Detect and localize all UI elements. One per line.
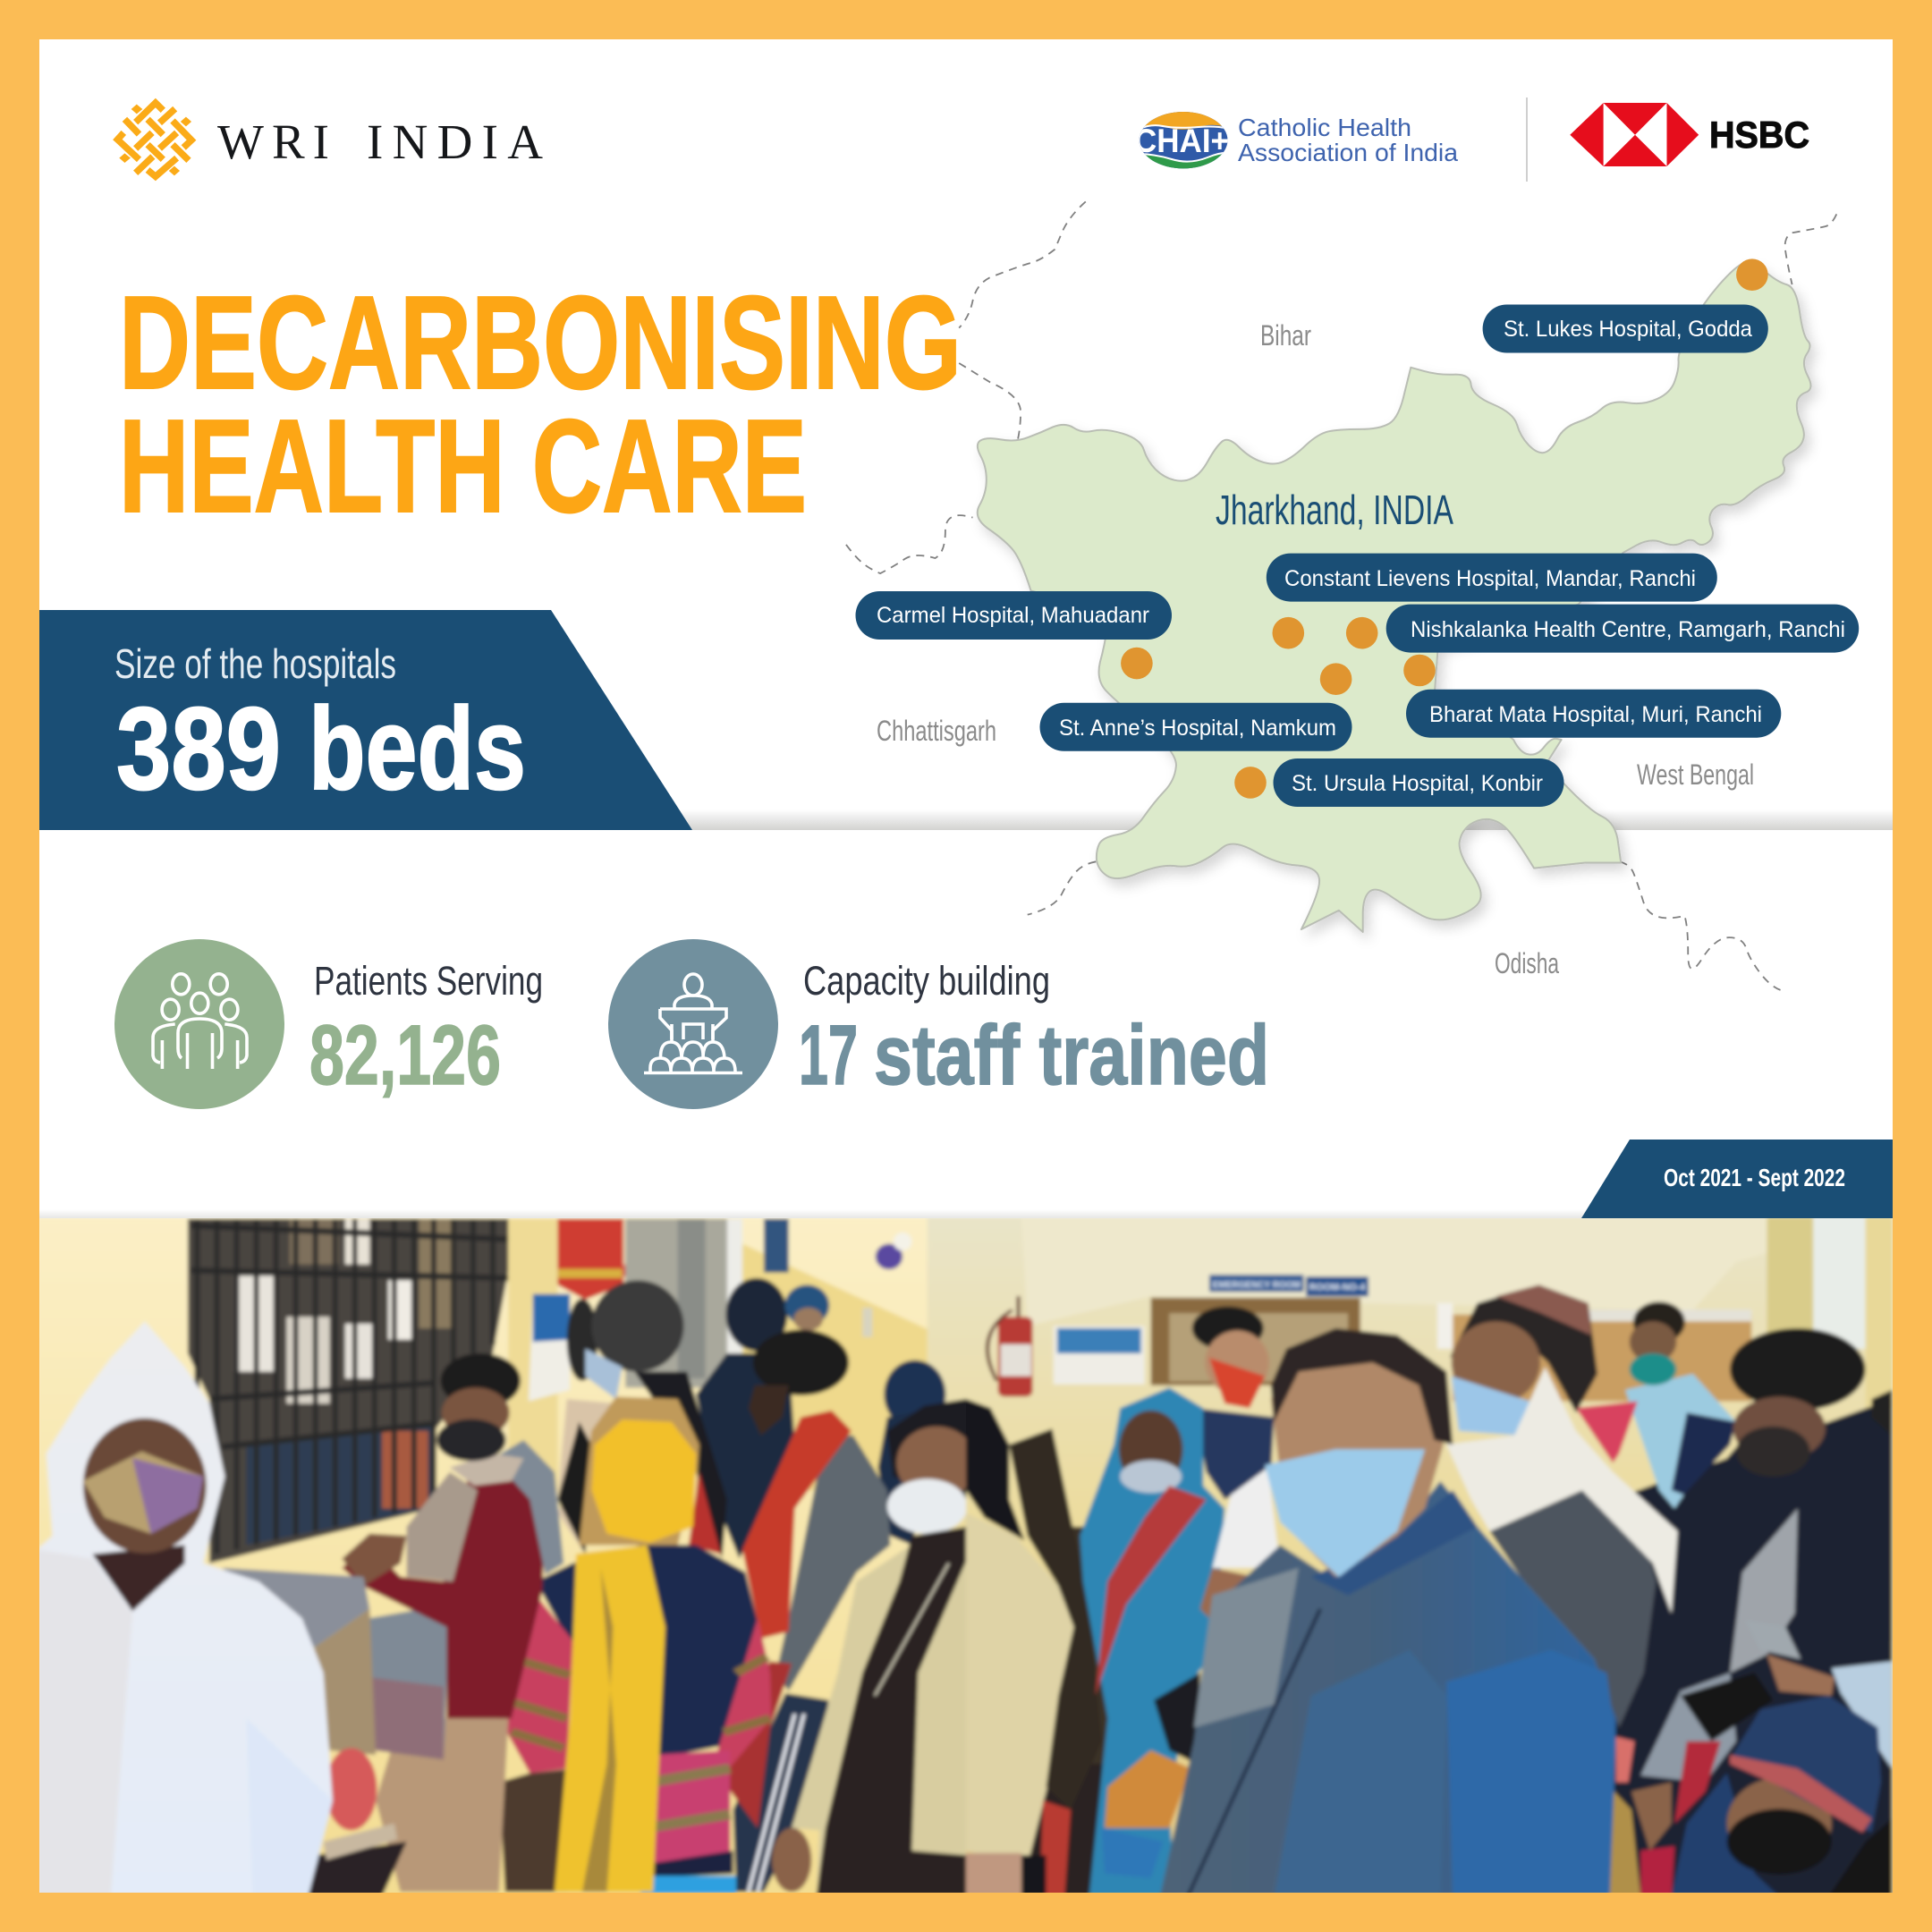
pill: Carmel Hospital [855, 591, 1172, 640]
blue sari woman [1080, 1387, 1224, 1896]
banner: size of the hospitals: beds [309, 682, 526, 814]
logo divider [1526, 97, 1528, 182]
stat: patients serving [114, 939, 543, 1109]
logo wordmark INDIA: INDIA [367, 114, 543, 169]
logo: WRI India [117, 103, 543, 176]
map shape [978, 262, 1810, 932]
title: HEALTH CARE [119, 393, 807, 540]
logo: CHAI [1140, 112, 1458, 168]
pill: Bharat Mata Hospital: Bharat Mata Hospital, Muri, Ranchi [1429, 702, 1762, 727]
pill: Nishkalanka Health Centre: Nishkalanka Health Centre, Ramgarh, Ranchi [1411, 617, 1845, 642]
marker dots [1121, 258, 1768, 799]
pill: St. Lukes Hospital [1483, 304, 1768, 352]
label: Odisha: Odisha [1495, 947, 1559, 979]
wall shading [742, 1244, 930, 1490]
notice sign [529, 1294, 570, 1402]
fire pipe [557, 1219, 623, 1300]
room signs [1209, 1275, 1368, 1296]
label: Capacity building [803, 958, 1050, 1004]
green mask man [1625, 1374, 1736, 1509]
bottom right person in beanie [1672, 1773, 1779, 1896]
maroon sweater woman [376, 1718, 508, 1892]
back nun [884, 1360, 945, 1428]
granite counter [222, 1568, 369, 1648]
date tag: Oct 2021 - Sept 2022 [1664, 1164, 1845, 1191]
room signs: ROOM-NO-4 [1309, 1282, 1366, 1292]
right man with scarf [1638, 1417, 1892, 1718]
pill: Constant Lievens Hospital: Constant Lievens Hospital, Mandar, Ranchi [1284, 566, 1696, 591]
logo text line 2: Association of India [1238, 139, 1458, 166]
label: West Bengal: West Bengal [1637, 758, 1754, 791]
pill: St. Ursula Hospital: St. Ursula Hospital, Konbir [1292, 771, 1543, 796]
wall pillar [508, 1219, 557, 1493]
title: DECARBONISING [119, 269, 962, 417]
notice sign [1054, 1326, 1145, 1385]
logo text line 1: Catholic Health [1238, 114, 1411, 141]
pill: St. Lukes Hospital: St. Lukes Hospital, Godda [1504, 317, 1752, 342]
value: staff trained: staff trained [874, 1008, 1269, 1103]
door [1151, 1298, 1360, 1385]
black hat man [567, 1299, 597, 1381]
pill: Bharat Mata Hospital [1406, 690, 1781, 738]
fire extinguisher [998, 1317, 1032, 1397]
logo wordmark WRI: WRI [217, 114, 329, 169]
pill: Constant Lievens Hospital [1267, 554, 1717, 602]
band shadow [39, 809, 1893, 830]
nun in foreground [887, 1399, 966, 1499]
old man with white scarf [1489, 1490, 1656, 1727]
banner: size of the hospitals [39, 610, 692, 830]
dark crowd base [1606, 1399, 1892, 1896]
upper wall [1025, 1248, 1765, 1325]
grille window [188, 1219, 508, 1563]
glass door [625, 1219, 742, 1387]
floral shawl woman [1009, 1428, 1102, 1809]
pill: St. Anne's Hospital: St. Anne’s Hospital, Namkum [1059, 716, 1336, 741]
pill: St. Anne's Hospital [1039, 703, 1352, 751]
icon: patients group [114, 939, 284, 1109]
right pillar and window [1767, 1216, 1817, 1344]
hooded person [725, 1278, 787, 1352]
HSBC wordmark: HSBC [1709, 114, 1809, 156]
right half of photo [966, 1216, 1894, 1896]
lower band shadow [39, 1209, 1893, 1218]
icon: WRI knot [117, 103, 191, 176]
icon: CHAI globe: CHAI+ [1134, 123, 1229, 159]
red mask man [1194, 1408, 1274, 1499]
red hood [1576, 1402, 1638, 1463]
white tee and arm [1213, 1468, 1280, 1568]
map: Jharkhand [846, 201, 1859, 990]
value: 82,126 [309, 1008, 501, 1103]
blue turban person [785, 1285, 829, 1326]
pink cloth [326, 1748, 377, 1830]
label: Chhattisgarh: Chhattisgarh [877, 715, 996, 747]
date tag [1581, 1140, 1893, 1218]
pill: Nishkalanka Health Centre [1386, 605, 1859, 653]
label: Jharkhand: Jharkhand, INDIA [1216, 487, 1453, 533]
left half of photo [37, 1216, 977, 1896]
room signs: EMERGENCY ROOM [1213, 1279, 1301, 1290]
label: Bihar: Bihar [1260, 319, 1311, 352]
map borders dashed [846, 201, 1836, 990]
red scarf man [753, 1330, 849, 1395]
label: Patients Serving [314, 958, 543, 1004]
wood panel [1453, 1315, 1751, 1402]
icon: HSBC hexagon [1570, 103, 1699, 166]
banner: size of the hospitals: 389 [116, 682, 281, 814]
patterned shawl [577, 1394, 703, 1549]
value: 17: 17 [799, 1008, 858, 1103]
stat: capacity building [608, 939, 1269, 1109]
icon: CHAI globe [1140, 112, 1227, 168]
logo: HSBC [1570, 103, 1809, 166]
yellow scarf woman [536, 1545, 770, 1759]
pill: Carmel Hospital: Carmel Hospital, Mahuadanr [877, 603, 1149, 628]
wall poster [764, 1219, 789, 1273]
left nun [966, 1513, 1074, 1864]
pill: St. Ursula Hospital [1274, 758, 1563, 807]
title [119, 269, 962, 540]
main man with blue mask [1160, 1481, 1616, 1896]
man in white PPE suit [37, 1321, 333, 1896]
photo: crowded hospital waiting area [37, 1216, 1894, 1896]
red cloth and basket [1640, 1846, 1674, 1896]
icon: trainer at lectern [608, 939, 778, 1109]
banner: size of the hospitals: Size of the hospitals [114, 640, 396, 687]
